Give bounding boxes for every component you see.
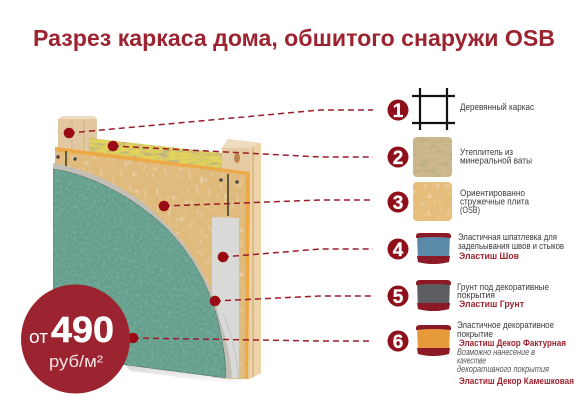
item 6: decorative coating xyxy=(388,320,574,386)
green decorative coating xyxy=(53,169,226,378)
item 4: seam filler: задельывания швов и стыков xyxy=(458,241,564,251)
item 2: mineral wool xyxy=(388,137,532,177)
item 5: primer: Эластиш Грунт xyxy=(459,299,525,309)
primer edge arc xyxy=(223,313,238,377)
item 2: mineral wool: Утеплитель из xyxy=(460,147,513,157)
item 5: primer: Грунт под декоративные xyxy=(457,282,549,292)
marker dots xyxy=(64,128,228,343)
item 2: mineral wool: 2 xyxy=(393,148,403,169)
item 6: decorative coating: 6 xyxy=(393,332,403,353)
ground shadow xyxy=(125,365,250,384)
item 6: decorative coating: декоративного покрытия xyxy=(457,364,549,374)
item 1: wooden frame: 1 xyxy=(393,101,404,122)
item 3: OSB xyxy=(388,182,529,221)
elastic filler strip xyxy=(212,217,239,378)
mineral wool insulation xyxy=(89,138,222,172)
bucket: Эластиш Грунт xyxy=(416,280,451,311)
item 2: mineral wool: минеральной ваты xyxy=(460,156,532,166)
bucket: Эластиш Декор xyxy=(416,325,451,356)
item 6: decorative coating: Возможно нанесение в xyxy=(457,347,535,357)
price badge: от xyxy=(29,327,48,347)
right wooden post xyxy=(222,139,261,379)
item 6: decorative coating: покрытие xyxy=(457,329,493,339)
studs and screws xyxy=(56,151,239,216)
item 3: OSB: (OSB) xyxy=(460,205,480,215)
item 6: decorative coating: Эластичное декоративное xyxy=(457,320,554,330)
item 6: decorative coating: Эластиш Декор Камешковая xyxy=(459,376,574,386)
OSB board xyxy=(55,147,250,379)
price badge: руб/м² xyxy=(49,353,104,371)
item 6: decorative coating: Эластиш Декор Фактурная xyxy=(459,338,566,348)
item 1: wooden frame: Деревянный каркас xyxy=(460,102,534,112)
primer layer xyxy=(53,163,232,379)
leader lines xyxy=(69,110,373,341)
item 4: seam filler: Эластичная шпатлевка для xyxy=(458,232,557,242)
item 5: primer: покрытия xyxy=(457,290,495,300)
wall cross-section illustration xyxy=(53,116,261,384)
item 4: seam filler: 4 xyxy=(393,240,404,261)
title: Разрез каркаса дома, обшитого снаружи OSB xyxy=(33,25,555,51)
left wooden post xyxy=(58,116,97,152)
item 6: decorative coating: качестве xyxy=(457,356,486,366)
price badge xyxy=(21,284,130,394)
item 5: primer: 5 xyxy=(393,287,404,308)
item 3: OSB: стружечные плита xyxy=(460,196,529,206)
bucket: Эластиш Шов xyxy=(416,233,451,264)
item 1: wooden frame xyxy=(388,88,534,130)
item 3: OSB: 3 xyxy=(393,193,403,214)
price badge: 490 xyxy=(51,309,114,350)
item 5: primer xyxy=(388,280,549,311)
item 4: seam filler: Эластиш Шов xyxy=(459,251,519,261)
item 3: OSB: Ориентированно xyxy=(460,188,525,198)
item 4: seam filler xyxy=(388,232,564,264)
